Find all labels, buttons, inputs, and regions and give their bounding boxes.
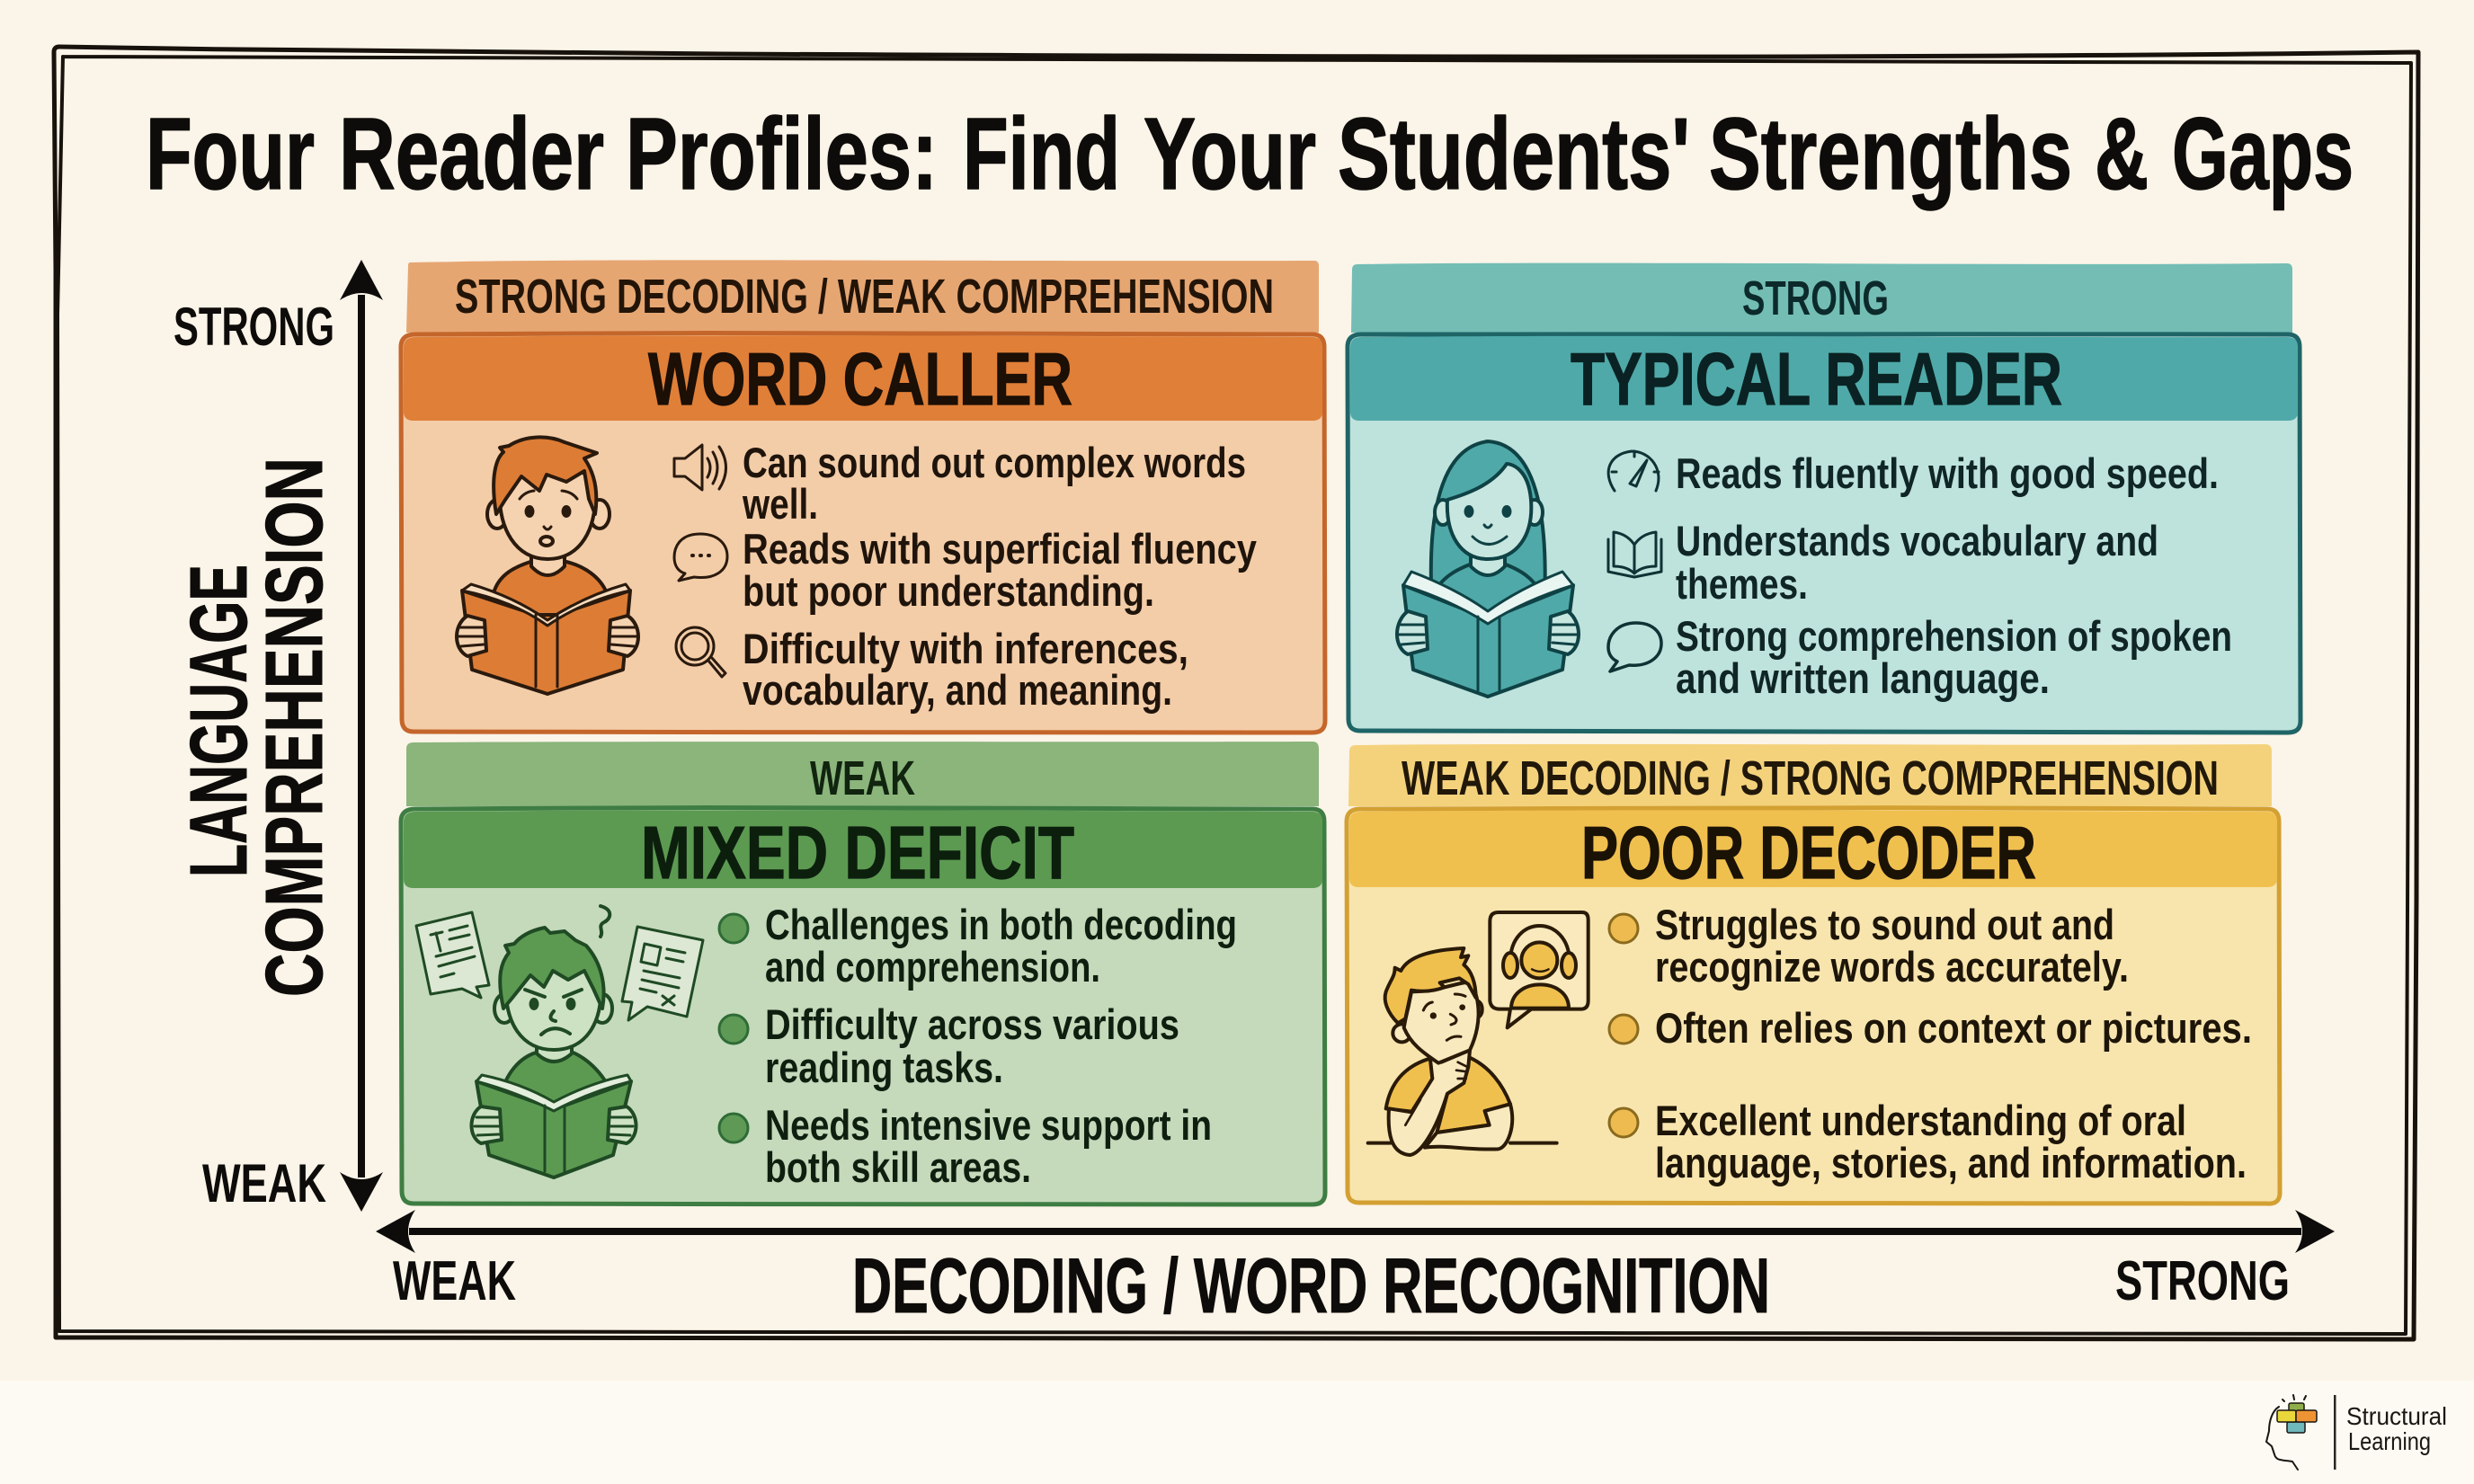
bullet text: understands vocabulary: Understands vocabulary and xyxy=(1676,517,2158,564)
footer band xyxy=(0,1381,2474,1484)
ribbon: weak: WEAK xyxy=(810,751,915,805)
title: Gaps xyxy=(2172,97,2354,210)
icon: speedometer xyxy=(1608,451,1659,491)
illustration: frustrated boy with documents xyxy=(416,906,703,1177)
horizontal axis label: weak: WEAK xyxy=(393,1250,516,1312)
bullet: needs intensive support: Needs intensive support in xyxy=(765,1101,1212,1149)
bullet: difficulty across tasks: reading tasks. xyxy=(765,1044,1003,1091)
panel: mixed deficit xyxy=(401,742,1325,1204)
vertical axis label: weak: WEAK xyxy=(202,1153,326,1213)
bullet text: can sound out: Can sound out complex words xyxy=(743,439,1246,486)
card header xyxy=(1349,810,2277,887)
bullet: struggles to sound out: recognize words accurately. xyxy=(1655,943,2129,991)
panel: poor decoder xyxy=(1347,744,2280,1204)
title: Students' xyxy=(1338,97,1690,210)
title: Strengths xyxy=(1709,97,2072,210)
bullet: often relies on context: Often relies on context or pictures. xyxy=(1655,1004,2252,1052)
bullet text: inferences: Difficulty with inferences, xyxy=(743,625,1188,672)
bullet: struggles to sound out xyxy=(1609,901,2129,991)
bullet text: can sound out xyxy=(742,439,1246,528)
logo icon: head with blocks xyxy=(2266,1395,2317,1470)
ribbon: strong decoding / weak comprehension: STRONG DECODING / WEAK COMPREHENSION xyxy=(455,270,1274,324)
card title: TYPICAL READER xyxy=(1571,337,2062,421)
bullet: difficulty across tasks: Difficulty across various xyxy=(765,1000,1179,1048)
bullet text: strong comprehension xyxy=(1676,612,2232,702)
bullet: excellent understanding xyxy=(1609,1097,2247,1186)
bullet text: inferences xyxy=(743,625,1188,714)
icon: open book xyxy=(1608,532,1661,577)
bullet text: strong comprehension: Strong comprehension of spoken xyxy=(1676,612,2232,660)
bullet: challenges in both xyxy=(719,901,1237,991)
illustration: boy reading xyxy=(457,437,638,694)
ribbon: strong: STRONG xyxy=(1742,271,1889,325)
bullet text: superficial fluency: Reads with superficial fluency xyxy=(743,525,1257,573)
panel: word caller xyxy=(401,260,1325,733)
bullet text: strong comprehension: and written language. xyxy=(1676,654,2050,702)
title xyxy=(146,97,2354,210)
logo: structural learning xyxy=(2266,1395,2447,1470)
card body xyxy=(401,333,1325,733)
illustration: thinking child with speech bubble xyxy=(1368,912,1589,1155)
logo wordmark xyxy=(2346,1402,2447,1455)
title: & xyxy=(2095,97,2149,210)
card header xyxy=(404,810,1322,888)
card title: MIXED DEFICIT xyxy=(641,811,1074,894)
bullet: needs intensive support xyxy=(719,1101,1212,1191)
bullet text: superficial fluency: but poor understanding. xyxy=(743,567,1154,615)
bullet: excellent understanding: Excellent understanding of oral xyxy=(1655,1097,2186,1144)
ribbon: strong xyxy=(1351,263,2292,333)
ribbon: weak xyxy=(406,742,1319,806)
icon: magnifying glass xyxy=(676,627,725,677)
card body xyxy=(401,807,1325,1204)
vertical axis arrow xyxy=(340,260,383,1212)
icon: speech bubble xyxy=(1608,623,1661,671)
title: Profiles: xyxy=(626,97,938,210)
logo wordmark: Structural xyxy=(2346,1402,2447,1430)
logo wordmark: Learning xyxy=(2348,1427,2431,1455)
horizontal axis: decoding / word recognition xyxy=(376,1210,2335,1329)
title: Your xyxy=(1144,97,1316,210)
card body xyxy=(1347,807,2280,1204)
card header xyxy=(1350,336,2298,421)
horizontal axis title: DECODING / WORD RECOGNITION xyxy=(852,1243,1770,1329)
bullet: needs intensive support: both skill areas. xyxy=(765,1143,1031,1191)
icon: speech bubble with dots xyxy=(674,534,727,581)
vertical axis: language comprehension xyxy=(174,260,383,1213)
vertical axis label: strong: STRONG xyxy=(174,297,334,357)
bullet text: can sound out: well. xyxy=(742,480,818,528)
card title: POOR DECODER xyxy=(1581,811,2036,894)
illustration: girl reading xyxy=(1397,441,1579,697)
vertical axis title: COMPREHENSION xyxy=(250,458,340,997)
bullet text: understands vocabulary xyxy=(1676,517,2158,608)
vertical axis title: LANGUAGE xyxy=(174,564,264,877)
bullet: difficulty across tasks xyxy=(719,1000,1179,1091)
bullet: struggles to sound out: Struggles to sound out and xyxy=(1655,901,2114,948)
bullet: excellent understanding: language, stories, and information. xyxy=(1655,1139,2247,1186)
bullet text: inferences: vocabulary, and meaning. xyxy=(743,666,1172,714)
bullet: challenges in both: Challenges in both decoding xyxy=(765,901,1237,948)
card header xyxy=(404,335,1322,421)
ribbon: strong decoding / weak comprehension xyxy=(406,260,1319,333)
title: Reader xyxy=(339,97,604,210)
bullet: challenges in both: and comprehension. xyxy=(765,943,1100,991)
card body xyxy=(1348,333,2300,733)
icon: speaker xyxy=(674,445,726,490)
title: Find xyxy=(963,97,1120,210)
bullet text: superficial fluency xyxy=(743,525,1257,615)
vertical axis title xyxy=(174,458,340,997)
title: Four xyxy=(146,97,315,210)
horizontal axis label: strong: STRONG xyxy=(2115,1250,2290,1312)
bullet text: understands vocabulary: themes. xyxy=(1676,560,1808,608)
card title: WORD CALLER xyxy=(648,337,1072,421)
ribbon: weak decoding / strong comprehension xyxy=(1348,744,2272,806)
panel: typical reader xyxy=(1348,263,2300,733)
horizontal axis arrow xyxy=(376,1210,2335,1253)
logo divider xyxy=(2334,1395,2336,1470)
bullet text: reads fluently: Reads fluently with good speed. xyxy=(1676,449,2219,497)
